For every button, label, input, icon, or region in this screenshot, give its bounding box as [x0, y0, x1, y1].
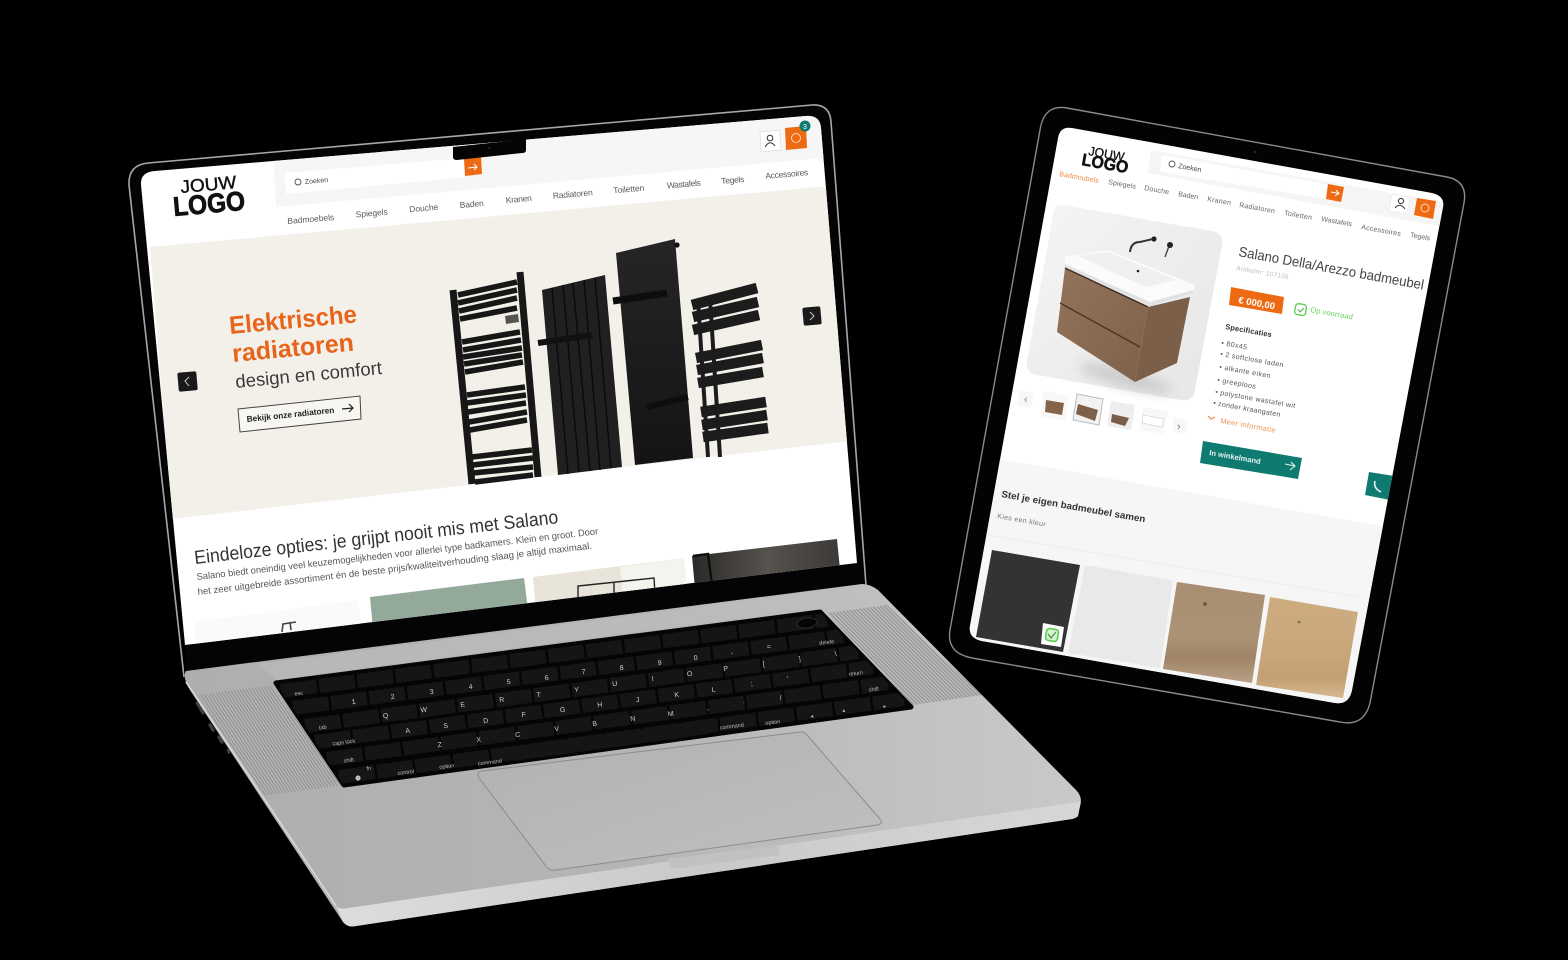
tablet navigation: Tegels — [1410, 232, 1431, 243]
search button — [464, 157, 482, 176]
key labels: , — [706, 705, 709, 712]
key labels: fn — [366, 766, 372, 772]
key labels: J — [636, 697, 640, 704]
tablet navigation: Douche — [1144, 185, 1170, 196]
configurator section — [970, 459, 1383, 704]
specifications: • 2 softclose laden — [1220, 351, 1284, 369]
key labels: H — [597, 702, 603, 709]
tablet camera — [1254, 151, 1256, 153]
radiator 4: designer slats — [692, 288, 768, 457]
navigation: Spiegels — [355, 207, 388, 219]
hero button: Bekijk onze radiatoren — [246, 405, 335, 424]
key labels: W — [420, 707, 428, 714]
navigation: Kranen — [505, 193, 532, 205]
key labels: shift — [344, 757, 355, 765]
key labels: option — [765, 719, 781, 727]
key rows — [281, 620, 904, 777]
tablet search band — [1148, 150, 1447, 227]
tablet navigation: Baden — [1178, 191, 1199, 201]
key labels: command — [478, 759, 502, 767]
key labels: command — [720, 723, 744, 731]
key labels: O — [687, 671, 693, 678]
header band — [274, 116, 824, 207]
selected check — [1041, 623, 1064, 647]
key labels: D — [483, 718, 489, 725]
colour swatch: light grey — [1068, 565, 1173, 668]
configurator heading: Stel je eigen badmeubel samen — [1000, 489, 1146, 525]
key labels: Z — [437, 742, 443, 749]
tablet screen — [970, 128, 1444, 704]
section paragraph: Salano biedt oneindig veel keuzemogelijkheden voor allerlei type badkamers. Klein en groot. Door — [196, 526, 599, 583]
tablet body — [949, 107, 1465, 723]
product title: Salano Della/Arezzo badmeubel — [1237, 243, 1425, 293]
radiator 3: flat panel — [613, 239, 693, 465]
phone button — [1365, 472, 1392, 500]
hero title line 2: radiatoren — [231, 329, 355, 368]
key labels: tab — [319, 725, 327, 731]
tablet navigation: Spiegels — [1108, 179, 1137, 191]
navigation: Accessoires — [765, 167, 809, 181]
key labels: option — [439, 763, 455, 771]
webcam notch — [453, 139, 526, 160]
key labels: T — [536, 692, 542, 699]
left edge highlight — [186, 682, 336, 906]
section heading: Eindeloze opties: je grijpt nooit mis met Salano — [193, 507, 559, 569]
key labels: control — [397, 769, 414, 777]
tablet navigation: Accessoires — [1361, 224, 1402, 238]
thumbnails: › — [1177, 421, 1181, 433]
navigation: Badmoebels — [287, 212, 335, 226]
key labels: [ — [762, 661, 765, 668]
hero subtitle: design en comfort — [234, 357, 383, 392]
more information: Meer informatie — [1220, 416, 1276, 435]
key labels: ' — [787, 676, 789, 683]
key labels: M — [667, 711, 674, 718]
navigation — [287, 167, 809, 226]
key labels: R — [499, 697, 505, 704]
tablet cart button — [1414, 198, 1436, 219]
specifications: • alkante eiken — [1219, 364, 1271, 380]
thumbnails: ‹ — [1024, 394, 1028, 406]
laptop deck — [185, 584, 1081, 926]
colour swatch: dark oak — [1163, 582, 1265, 683]
tablet user button — [1390, 195, 1409, 213]
key labels: ◂ — [810, 714, 814, 720]
key labels: 2 — [390, 694, 395, 701]
key labels: I — [651, 676, 654, 683]
touch id — [796, 617, 818, 629]
stock status: Op voorraad — [1310, 305, 1354, 321]
faucet — [1130, 239, 1153, 252]
tablet navigation — [1059, 171, 1431, 243]
add to cart button: In winkelmand — [1209, 448, 1262, 466]
rear strip of the deck — [258, 586, 875, 680]
navigation: Toiletten — [613, 183, 645, 195]
key labels: S — [443, 723, 449, 730]
washbasin — [1065, 250, 1195, 305]
key labels: esc — [294, 690, 304, 698]
key labels: C — [515, 732, 521, 739]
key labels: ; — [750, 681, 753, 688]
key labels: K — [674, 692, 680, 699]
keyboard — [276, 612, 911, 785]
navigation: Douche — [409, 202, 439, 214]
price badge: € 000,00 — [1237, 295, 1276, 312]
tablet logo: LOGO — [1080, 150, 1130, 177]
add to cart button — [1200, 441, 1302, 479]
tablet logo: JOUW — [1087, 144, 1126, 164]
navigation: Baden — [459, 198, 484, 210]
hero button — [238, 396, 361, 432]
key labels: 9 — [657, 660, 662, 667]
thumbnails — [1024, 393, 1180, 430]
cabinet front — [1057, 268, 1148, 382]
colour swatch: anthracite — [976, 550, 1080, 652]
key labels: P — [723, 666, 729, 673]
laptop lid — [129, 105, 866, 690]
key labels: Q — [383, 713, 389, 720]
key labels: L — [711, 687, 716, 694]
key labels: 0 — [693, 655, 698, 662]
key labels: 5 — [506, 679, 511, 686]
specifications: Specificaties — [1225, 322, 1273, 339]
specifications — [1213, 322, 1296, 419]
search box — [285, 157, 482, 194]
laptop — [129, 100, 1081, 926]
key labels: E — [460, 702, 466, 709]
product image — [1027, 205, 1222, 400]
key labels: / — [779, 695, 782, 702]
left speaker grille — [198, 685, 342, 796]
key labels: 8 — [619, 665, 624, 672]
hero banner — [150, 186, 850, 519]
thermostat — [505, 314, 519, 324]
navigation: Radiatoren — [552, 187, 593, 201]
category image: faucet — [195, 600, 362, 650]
key labels: B — [592, 721, 598, 728]
article number: Artikelnr: 107105 — [1236, 265, 1289, 281]
tablet logo — [1082, 146, 1128, 173]
radiator 2: slatted panel — [538, 275, 622, 475]
navigation: Tegels — [721, 174, 745, 186]
tablet search button — [1326, 184, 1344, 202]
key labels: X — [476, 737, 482, 744]
front lip — [336, 802, 1081, 926]
key labels: Y — [574, 687, 580, 694]
tablet search box: Zoeken — [1178, 163, 1202, 174]
specifications: • 80x45 — [1221, 340, 1248, 352]
specifications: • zonder kraangaten — [1213, 400, 1281, 419]
tablet navigation: Radiatoren — [1239, 202, 1275, 215]
key labels: V — [554, 726, 560, 733]
logo — [174, 176, 244, 216]
trackpad — [478, 732, 881, 870]
key labels: ▸ — [883, 704, 887, 710]
key labels: 1 — [351, 699, 356, 706]
tablet navigation: Kranen — [1207, 196, 1232, 207]
laptop screen — [130, 100, 870, 660]
key labels — [294, 639, 887, 781]
category image: green wall — [370, 578, 530, 640]
key labels: U — [612, 681, 618, 688]
hero title: Elektrische — [228, 300, 358, 340]
key labels: ] — [798, 656, 801, 663]
key labels: - — [730, 650, 734, 657]
tablet navigation: Toiletten — [1284, 210, 1313, 222]
key labels: = — [766, 644, 771, 651]
stock status — [1294, 303, 1354, 321]
navigation: Wastafels — [666, 178, 701, 190]
specifications: • polystone wastafel wit — [1215, 389, 1296, 410]
key labels: . — [742, 698, 745, 705]
cabinet side — [1135, 297, 1190, 382]
specifications: • greeploos — [1217, 377, 1257, 391]
section paragraph: het zeer uitgebreide assortiment én de beste prijs/kwaliteitverhouding slaag je altijd maximaal. — [197, 541, 593, 598]
next arrow — [802, 306, 822, 326]
key labels: delete — [819, 639, 835, 647]
key labels: N — [630, 716, 636, 723]
key labels: 4 — [468, 684, 473, 691]
key labels: 6 — [544, 675, 549, 682]
notch on front edge — [668, 845, 780, 869]
tablet navigation: Wastafels — [1321, 216, 1353, 228]
cart button — [785, 120, 810, 150]
colour swatch: light oak — [1256, 597, 1358, 698]
tablet search box — [1160, 155, 1344, 202]
key labels: caps lock — [332, 739, 356, 747]
user button — [760, 130, 781, 152]
key labels: shift — [869, 686, 880, 694]
cart button: 3 — [803, 124, 807, 131]
previous arrow — [177, 371, 198, 392]
colour prompt: Kies een kleur — [997, 513, 1047, 529]
category image: dark interior — [692, 539, 842, 600]
key labels: A — [405, 728, 411, 735]
radiator 1: towel ladder — [453, 272, 538, 484]
side ports — [197, 703, 229, 753]
price badge — [1229, 287, 1284, 314]
search box: Zoeken — [305, 177, 329, 186]
key labels: 3 — [429, 689, 434, 696]
key labels: return — [848, 670, 863, 678]
key labels: F — [521, 712, 526, 719]
key labels: ▴ — [842, 708, 846, 714]
tablet navigation: Badmoubels — [1059, 171, 1100, 185]
logo: LOGO — [172, 186, 246, 222]
right speaker grille — [827, 605, 982, 705]
key labels: 7 — [581, 669, 586, 676]
key labels: \ — [834, 651, 837, 658]
logo: JOUW — [180, 172, 237, 197]
category image: shower frame — [533, 558, 688, 620]
key labels: G — [560, 707, 566, 714]
tablet — [949, 100, 1470, 723]
